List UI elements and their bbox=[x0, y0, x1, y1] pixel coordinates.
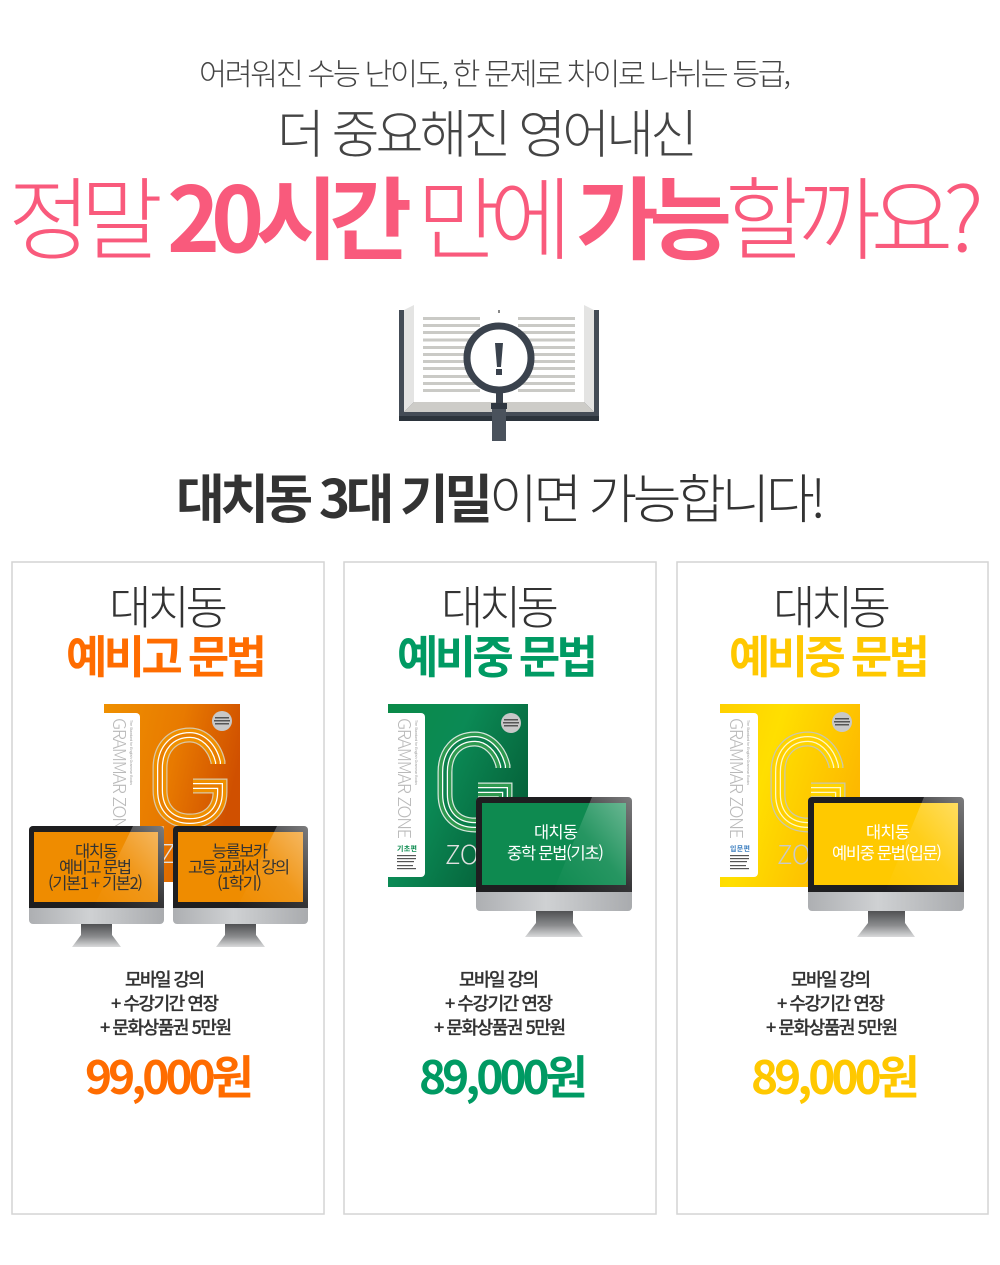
book cover: orange Grammar Zone: The Standard for English Grammar Books bbox=[129, 720, 133, 785]
price: 89,000원 bbox=[751, 1042, 920, 1108]
monitor: 대치동 예비고 문법: 대치동 bbox=[75, 838, 118, 862]
monitor: 대치동 예비중 문법(입문) bbox=[808, 797, 964, 937]
main headline: 정말 bbox=[8, 148, 163, 278]
book cover: green Grammar Zone: The Standard for English Grammar Books bbox=[414, 720, 418, 785]
monitor: 대치동 예비중 문법(입문): 예비중 문법(입문) bbox=[832, 840, 942, 864]
benefit list: 모바일 강의 bbox=[125, 966, 205, 992]
intro line 2: 더 중요해진 영어내신 bbox=[277, 93, 698, 168]
panel heading: 대치동 bbox=[109, 572, 228, 638]
book cover: green Grammar Zone: ZO bbox=[445, 835, 479, 872]
benefit list: + 수강기간 연장 bbox=[777, 990, 885, 1016]
panel: 예비고 문법 bbox=[12, 562, 324, 1214]
panel heading: 예비고 문법 bbox=[66, 621, 267, 686]
book cover: green Grammar Zone: GRAMMAR ZONE bbox=[392, 718, 418, 839]
benefit list: 모바일 강의 bbox=[791, 966, 871, 992]
monitor: 대치동 중학 문법(기초): 대치동 bbox=[534, 819, 578, 843]
panel heading bbox=[729, 572, 930, 686]
panel heading: 예비중 문법 bbox=[397, 621, 598, 686]
benefit list: + 문화상품권 5만원 bbox=[100, 1014, 232, 1040]
benefit list: 모바일 강의 bbox=[459, 966, 539, 992]
monitor: 대치동 예비고 문법: 예비고 문법 bbox=[59, 854, 132, 878]
main headline: 20시간 bbox=[167, 148, 412, 278]
main headline: 할까요? bbox=[725, 148, 984, 278]
main headline: 가능 bbox=[576, 148, 732, 278]
benefit list: + 문화상품권 5만원 bbox=[434, 1014, 566, 1040]
book cover: yellow Grammar Zone: 입문편 bbox=[730, 844, 750, 854]
monitor: 능률보카 고등 교과서 강의: 고등 교과서 강의 bbox=[188, 854, 290, 878]
panel: 예비중 문법 기초 bbox=[344, 562, 656, 1214]
monitor: 능률보카 고등 교과서 강의: 능률보카 bbox=[212, 838, 268, 862]
monitor: 능률보카 고등 교과서 강의: (1학기) bbox=[217, 870, 262, 894]
book cover: yellow Grammar Zone: GRAMMAR ZONE bbox=[724, 718, 750, 839]
subheading bbox=[176, 458, 826, 534]
book cover: yellow Grammar Zone: The Standard for English Grammar Books bbox=[746, 720, 750, 785]
book cover: yellow Grammar Zone bbox=[720, 704, 860, 887]
panel heading bbox=[397, 572, 598, 686]
benefit list: + 수강기간 연장 bbox=[445, 990, 553, 1016]
book cover: green Grammar Zone bbox=[388, 704, 528, 887]
panel: 예비중 문법 입문 bbox=[677, 562, 988, 1214]
monitor: 능률보카 고등 교과서 강의 bbox=[173, 826, 308, 947]
benefit list bbox=[766, 966, 898, 1040]
panel heading: 대치동 bbox=[441, 572, 559, 638]
book cover: orange Grammar Zone: ZO bbox=[160, 834, 194, 871]
monitor: 대치동 예비고 문법: (기본1 + 기본2) bbox=[48, 870, 143, 894]
panel heading: 대치동 bbox=[773, 572, 891, 638]
monitor: 대치동 중학 문법(기초) bbox=[476, 797, 632, 937]
monitor: 대치동 예비고 문법 bbox=[29, 826, 164, 947]
book cover: orange Grammar Zone: GRAMMAR ZONE bbox=[107, 718, 133, 839]
benefit list bbox=[100, 966, 232, 1040]
book cover: yellow Grammar Zone: ZO bbox=[777, 835, 811, 872]
main headline bbox=[8, 148, 984, 278]
book cover: green Grammar Zone: 기초편 bbox=[397, 844, 417, 854]
benefit list bbox=[434, 966, 566, 1040]
main headline: 만에 bbox=[417, 148, 572, 278]
price: 99,000원 bbox=[85, 1042, 254, 1108]
subheading: 대치동 3대 기밀 bbox=[176, 458, 493, 534]
icon: open book with magnifier and exclamation mark bbox=[399, 305, 599, 441]
price: 89,000원 bbox=[419, 1042, 588, 1108]
benefit list: + 문화상품권 5만원 bbox=[766, 1014, 898, 1040]
panel heading bbox=[66, 572, 267, 686]
intro line 1: 어려워진 수능 난이도, 한 문제로 차이로 나뉘는 등급, bbox=[199, 50, 791, 94]
panel heading: 예비중 문법 bbox=[729, 621, 930, 686]
book cover: orange Grammar Zone bbox=[104, 704, 240, 882]
monitor: 대치동 중학 문법(기초): 중학 문법(기초) bbox=[507, 840, 604, 864]
subheading: 이면 가능합니다! bbox=[489, 458, 826, 534]
benefit list: + 수강기간 연장 bbox=[111, 990, 219, 1016]
monitor: 대치동 예비중 문법(입문): 대치동 bbox=[866, 819, 910, 843]
